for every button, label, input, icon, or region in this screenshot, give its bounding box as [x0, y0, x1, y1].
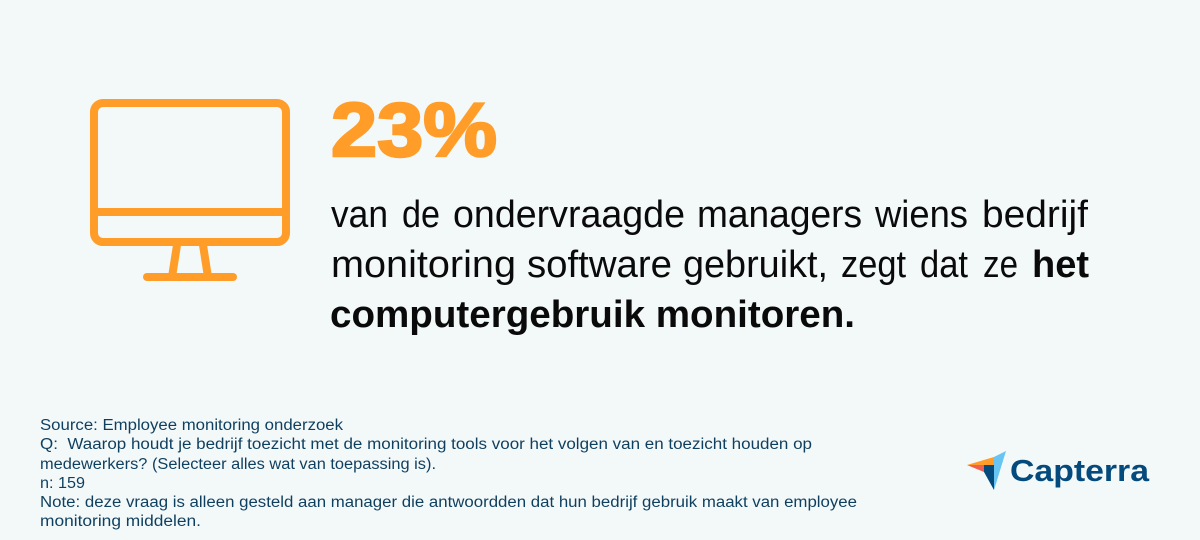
logo wordmark: Capterra — [1010, 453, 1150, 488]
text block: main statement: managers — [697, 194, 862, 236]
text block: source notes: Note: deze vraag is alleen gesteld aan manager die antwoordden dat hun bedrijf gebruik maakt van employee — [40, 494, 857, 511]
text block: source notes: monitoring middelen. — [40, 513, 201, 530]
text block: main statement: dat — [920, 244, 968, 286]
text block: main statement: ondervraagde — [453, 194, 685, 236]
text block: main statement: gebruikt, — [683, 244, 828, 286]
text block: source notes: Q: Waarop houdt je bedrijf toezicht met de monitoring tools voor het volgen van en toezicht houden op — [40, 436, 812, 453]
text block: source notes: Source: Employee monitoring onderzoek — [40, 417, 343, 434]
text block: main statement: monitoring — [331, 244, 516, 286]
text block: main statement: het — [1032, 244, 1089, 286]
text block: main statement: bedrijf — [982, 194, 1088, 236]
text block: main statement: software — [527, 244, 672, 286]
text block: main statement — [330, 194, 1089, 336]
text block: source notes — [40, 417, 857, 530]
text block: source notes: medewerkers? (Selecteer alles wat van toepassing is). — [40, 456, 436, 473]
logo: Capterra — [967, 451, 1150, 490]
text block: main statement: wiens — [874, 194, 968, 236]
text block: source notes: n: 159 — [40, 475, 85, 492]
text block: main statement: ze — [983, 244, 1018, 286]
text block: main statement: de — [402, 194, 440, 236]
text block: main statement: zegt — [841, 244, 906, 286]
text block: main statement: van — [331, 194, 388, 236]
heading: 23%: 23% — [331, 88, 497, 173]
icon: Capterra arrow — [967, 451, 1006, 490]
text block: main statement: computergebruik monitoren. — [330, 294, 855, 336]
icon: computer monitor — [94, 103, 286, 277]
